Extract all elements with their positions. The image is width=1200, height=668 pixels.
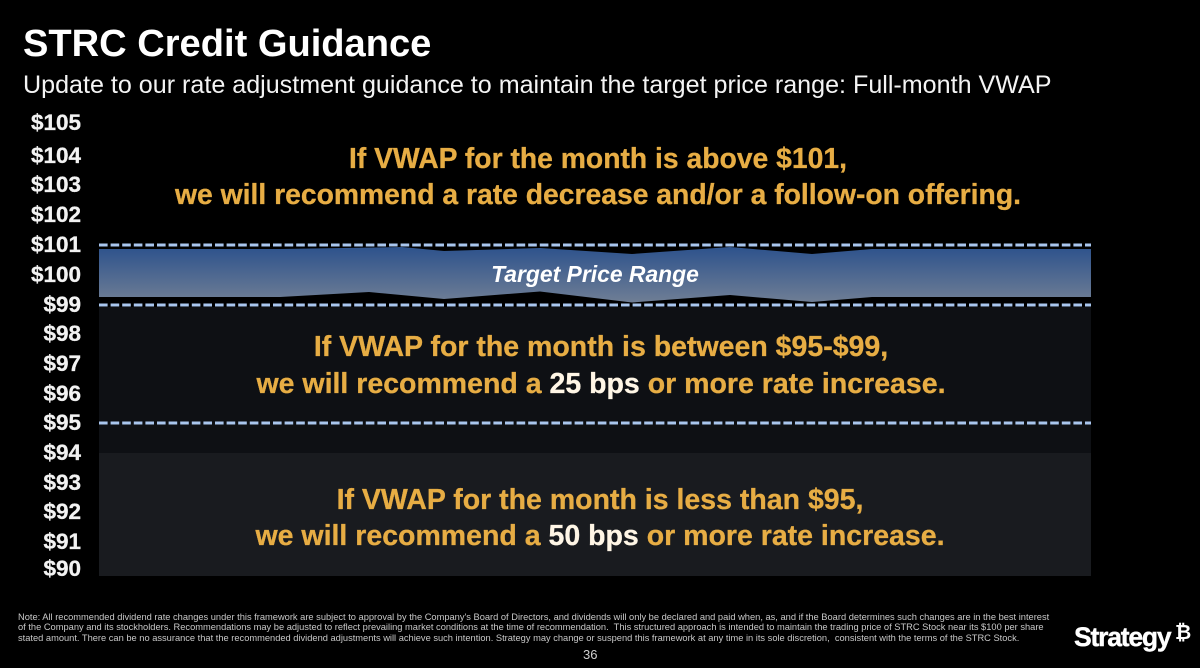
callout: below $95: If VWAP for the month is less than $95, <box>337 484 863 516</box>
price axis labels: $104 <box>31 143 81 168</box>
price axis labels: $101 <box>31 232 81 257</box>
label: target price range: Target Price Range <box>491 261 699 287</box>
callout: above $101: we will recommend a rate decrease and/or a follow-on offering. <box>175 178 1021 210</box>
panel: low dark zone <box>99 453 1091 576</box>
footnote: Note: All recommended dividend rate changes under this framework are subject to approval by the Company's Board of Directors, and dividends will only be declared and paid when, as, and if the Board determines such changes are in the best interest <box>18 612 1049 622</box>
footnote: stated amount. There can be no assurance that the recommended dividend adjustments will achieve such intention. Strategy may change or suspend this framework at any time in its sole discretion, consistent with the terms of the STRC Stock. <box>18 633 1019 643</box>
price axis labels: $95 <box>43 410 81 435</box>
price axis labels: $94 <box>43 440 81 465</box>
logo: Strategy: ₿ <box>1175 622 1191 644</box>
price axis labels: $98 <box>43 321 81 346</box>
subtitle: Update to our rate adjustment guidance to maintain the target price range: Full-month VWAP <box>23 71 1051 99</box>
price axis labels: $96 <box>43 381 81 406</box>
price axis labels: $103 <box>31 172 81 197</box>
callout: below $95 <box>255 484 945 552</box>
callout: between $95 and $99 <box>256 331 946 400</box>
callout: above $101: If VWAP for the month is above $101, <box>349 142 847 174</box>
title: STRC Credit Guidance <box>23 23 431 65</box>
page number: 36 <box>583 647 597 662</box>
price axis labels: $102 <box>31 202 81 227</box>
price axis labels: $90 <box>43 556 81 581</box>
price axis labels: $91 <box>43 529 81 554</box>
price axis labels: $100 <box>31 262 81 287</box>
price axis labels: $93 <box>43 470 81 495</box>
callout: below $95: we will recommend a 50 bps or more rate increase. <box>255 520 945 552</box>
callout: between $95 and $99: we will recommend a 25 bps or more rate increase. <box>256 368 946 400</box>
price axis labels: $92 <box>43 499 81 524</box>
panel: mid dark zone <box>99 307 1091 453</box>
logo: Strategy: Strategy <box>1074 622 1170 652</box>
price axis labels: $99 <box>43 292 81 317</box>
price axis labels <box>31 110 82 581</box>
price axis labels: $105 <box>31 110 81 135</box>
band: target price range <box>99 247 1091 302</box>
callout: between $95 and $99: If VWAP for the month is between $95-$99, <box>314 331 888 363</box>
footnote: of the Company and its stockholders. Recommendations may be adjusted to reflect prevailing market conditions at the time of recommendation. This structured approach is intended to maintain the trading price of STRC Stock near its $100 per share <box>18 622 1044 632</box>
callout: above $101 <box>174 142 1021 210</box>
footnote <box>18 612 1050 643</box>
price axis labels: $97 <box>43 351 81 376</box>
